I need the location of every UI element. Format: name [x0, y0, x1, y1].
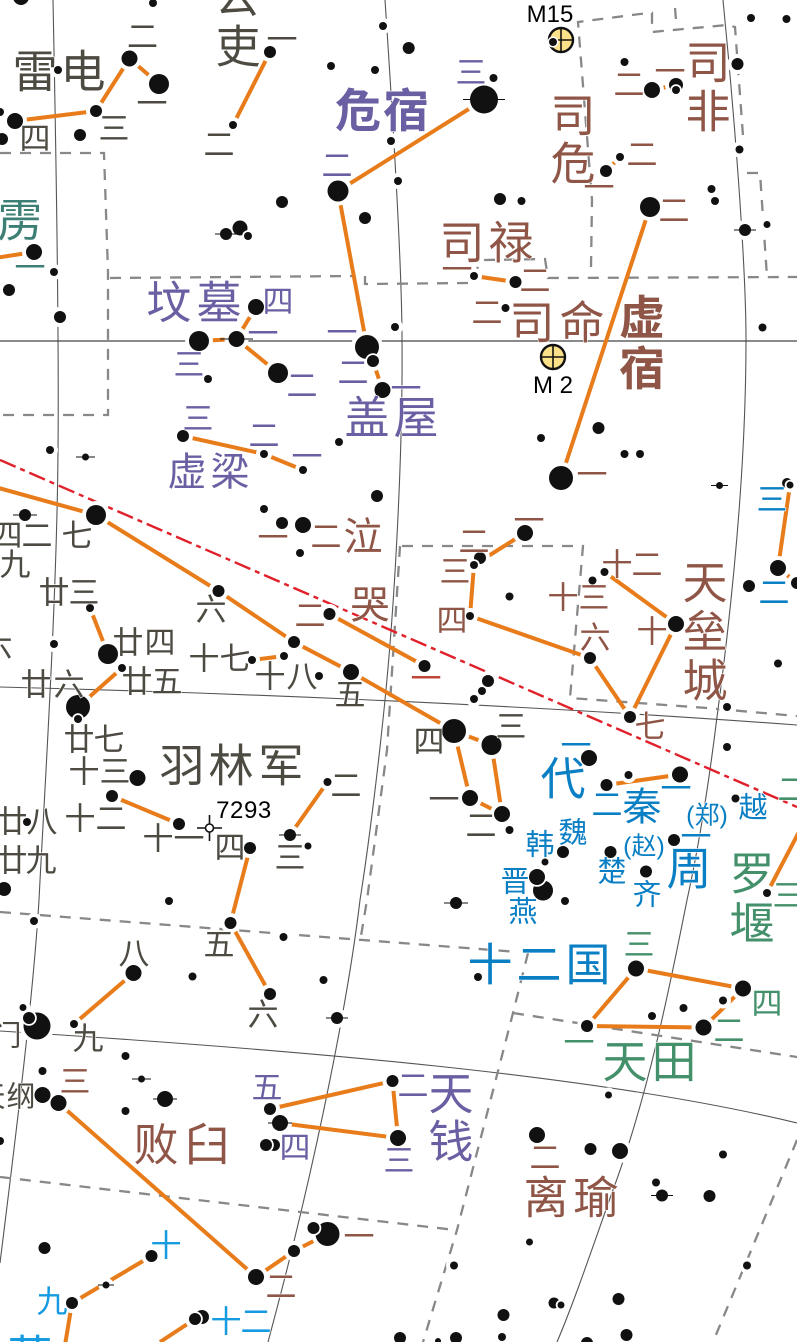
numbers: purple: 二 — [322, 149, 352, 184]
numbers: brown: 一 — [442, 253, 472, 288]
twelve states small names: 楚 — [597, 856, 627, 889]
numbers: purple: 二 — [398, 1069, 428, 1104]
numbers: blue — [560, 483, 790, 855]
numbers: brown: 三 — [440, 555, 470, 590]
stars: upper left — [0, 0, 402, 454]
numbers: brown: 二 — [294, 599, 326, 634]
numbers: light blue: 十 — [150, 1229, 182, 1264]
stars: central left — [0, 505, 359, 896]
name: 天田: 天田 — [602, 1036, 697, 1088]
numbers: green — [564, 773, 797, 1061]
name: 司危: 司危 — [550, 90, 596, 190]
numbers: dark grey: 十二 — [64, 802, 126, 837]
numbers: dark grey: 十八 — [254, 660, 318, 695]
numbers: dark grey: 三 — [496, 710, 526, 745]
numbers: teal: 一 — [14, 251, 46, 286]
name: 罗堰: 罗堰 — [729, 848, 775, 950]
numbers: dark grey: 一 — [136, 87, 168, 122]
numbers: brown: 一 — [258, 521, 288, 556]
numbers: dark grey: 三 — [98, 112, 130, 147]
numbers: purple: 二 — [286, 369, 318, 404]
numbers: light blue — [36, 1229, 272, 1340]
numbers: light blue: 九 — [36, 1285, 68, 1320]
numbers: purple: 三 — [456, 56, 486, 91]
name: 哭: 哭 — [350, 584, 390, 628]
numbers: dark grey: 六 — [248, 998, 278, 1033]
numbers: dark grey: 廿三 — [38, 576, 100, 611]
name: 司禄: 司禄 — [439, 218, 534, 268]
lunar mansions: 危宿: 危宿 — [335, 85, 429, 137]
numbers: brown: 二 — [266, 1270, 296, 1305]
bracketed state names: (赵) — [623, 832, 665, 860]
numbers: dark grey: 二 — [127, 20, 158, 55]
numbers: brown: 二 — [658, 194, 690, 229]
numbers: brown: 二 — [472, 296, 502, 331]
numbers: blue: 一 — [660, 772, 692, 807]
numbers: purple: 二 — [338, 356, 368, 391]
numbers: brown: 十二 — [602, 548, 662, 583]
name: 雷电: 雷电 — [12, 46, 106, 98]
label: 7293: 7293 — [216, 797, 272, 824]
numbers: blue: 二 — [592, 788, 622, 823]
numbers: purple: 四 — [280, 1131, 310, 1166]
twelve states small names: 燕 — [508, 896, 538, 929]
numbers: purple: 二 — [248, 419, 280, 454]
numbers: dark grey: 二 — [330, 769, 362, 804]
numbers: dark grey: 五 — [204, 928, 234, 963]
numbers: green: 三 — [624, 928, 654, 963]
name: 十二国: 十二国 — [467, 940, 611, 990]
numbers: dark grey: 十七 — [188, 642, 250, 677]
numbers: brown: 二 — [520, 264, 550, 299]
stars: upper right — [403, 14, 790, 442]
numbers: brown: 二 — [458, 525, 490, 560]
numbers: purple: 三 — [174, 348, 204, 383]
twelve states small names: 越 — [738, 792, 768, 825]
numbers: brown: 二 — [530, 1141, 560, 1176]
name: 天垒城: 天垒城 — [682, 558, 728, 706]
name: 司命: 司命 — [509, 298, 605, 348]
numbers: brown: 七 — [634, 710, 666, 745]
name: 坟墓: 坟墓 — [146, 278, 242, 328]
numbers: blue: 一 — [680, 820, 712, 855]
numbers: brown: 二 — [310, 520, 342, 555]
numbers: light blue: 十二 — [210, 1305, 272, 1340]
numbers: purple: 一 — [292, 440, 322, 475]
numbers: dark grey: 四 — [214, 831, 246, 866]
numbers: brown: 一 — [654, 55, 686, 90]
stars: central right — [418, 450, 797, 909]
numbers: dark grey: 三 — [274, 841, 306, 876]
twelve states small names — [0, 792, 768, 1114]
numbers: dark grey: 二 — [204, 128, 234, 163]
numbers: blue: 三 — [756, 483, 788, 518]
numbers: purple: 三 — [182, 402, 214, 437]
numbers: dark grey: 八 — [118, 937, 150, 972]
name: 败臼: 败臼 — [133, 1120, 230, 1170]
bracketed state names: (郑) — [686, 802, 728, 830]
numbers: dark grey: 二 — [466, 809, 496, 844]
twelve states small names: 晋 — [500, 867, 530, 899]
label: M 2: M 2 — [533, 372, 573, 399]
numbers: blue: 二 — [758, 576, 790, 611]
name: 离瑜: 离瑜 — [523, 1172, 619, 1224]
numbers: brown: 十 — [636, 615, 668, 650]
numbers: dark grey: 十三 — [68, 755, 130, 790]
numbers: purple: 四 — [262, 285, 294, 320]
numbers: purple: 五 — [252, 1071, 282, 1106]
globular cluster M15 — [549, 28, 573, 52]
numbers: purple: 一 — [326, 316, 358, 351]
stars: central upper — [19, 299, 399, 557]
numbers: dark grey: 五 — [334, 678, 366, 713]
numbers: brown: 六 — [580, 621, 610, 656]
numbers: brown: 一 — [576, 458, 608, 493]
numbers: blue: 一 — [560, 729, 592, 764]
name: 秦: 秦 — [622, 786, 662, 830]
stars: lower right — [394, 960, 751, 1342]
label: M15: M15 — [527, 1, 573, 28]
name: 盖屋: 盖屋 — [344, 392, 439, 444]
numbers: dark grey: 一 — [266, 23, 298, 58]
numbers: green: 四 — [752, 987, 782, 1022]
numbers: purple — [174, 56, 486, 1179]
numbers: brown: 二 — [626, 138, 658, 173]
numbers: dark grey: 廿四 — [112, 626, 176, 661]
numbers: dark grey: 廿七 — [64, 723, 124, 758]
numbers: brown: 一 — [584, 171, 614, 206]
numbers: brown: 二 — [614, 68, 644, 103]
lunar mansions: 虚宿: 虚宿 — [619, 292, 665, 395]
numbers: purple: 一 — [390, 372, 422, 407]
name: 泣: 泣 — [343, 516, 383, 560]
numbers: dark grey — [0, 20, 526, 1057]
numbers: red: 一 — [410, 662, 442, 697]
numbers: dark grey: 廿五 — [122, 665, 182, 700]
numbers: purple: 三 — [384, 1144, 414, 1179]
twelve states small names: 韩 — [525, 829, 555, 862]
numbers: dark grey: 六 — [196, 593, 226, 628]
twelve states small names: 齐 — [632, 879, 662, 912]
medium constellation names — [167, 452, 662, 830]
bracketed state names — [623, 802, 728, 860]
numbers: dark grey: 四 — [20, 122, 50, 157]
numbers: dark grey: 廿六 — [20, 668, 84, 703]
numbers: dark grey: 九 — [72, 1022, 104, 1057]
name: 代: 代 — [540, 754, 586, 804]
numbers: dark grey: 九 — [0, 548, 30, 583]
name: 天钱: 天钱 — [428, 1068, 474, 1168]
numbers: purple: 一 — [248, 317, 278, 352]
name: 周: 周 — [666, 844, 712, 894]
numbers: dark grey: 一 — [428, 783, 460, 818]
numbers: dark grey: 四 — [414, 725, 444, 760]
numbers: brown — [60, 55, 690, 1305]
numbers: brown: 三 — [60, 1065, 90, 1100]
numbers: brown: 四 — [436, 604, 468, 639]
numbers: green: 二 — [714, 1014, 744, 1049]
numbers: brown: 十三 — [548, 581, 610, 616]
numbers: dark grey: 十一 — [142, 822, 204, 857]
variable marker 7293 — [197, 815, 222, 841]
name: 羽林军: 羽林军 — [159, 740, 304, 792]
numbers: brown: 一 — [514, 504, 544, 539]
twelve states small names: 魏 — [558, 817, 588, 850]
name: 虚梁: 虚梁 — [167, 452, 250, 494]
globular cluster M2 — [541, 345, 565, 369]
numbers: green: 一 — [564, 1026, 594, 1061]
numbers: brown: 一 — [344, 1220, 374, 1255]
name: 司非: 司非 — [685, 38, 731, 138]
stars: lower left — [0, 897, 406, 1325]
